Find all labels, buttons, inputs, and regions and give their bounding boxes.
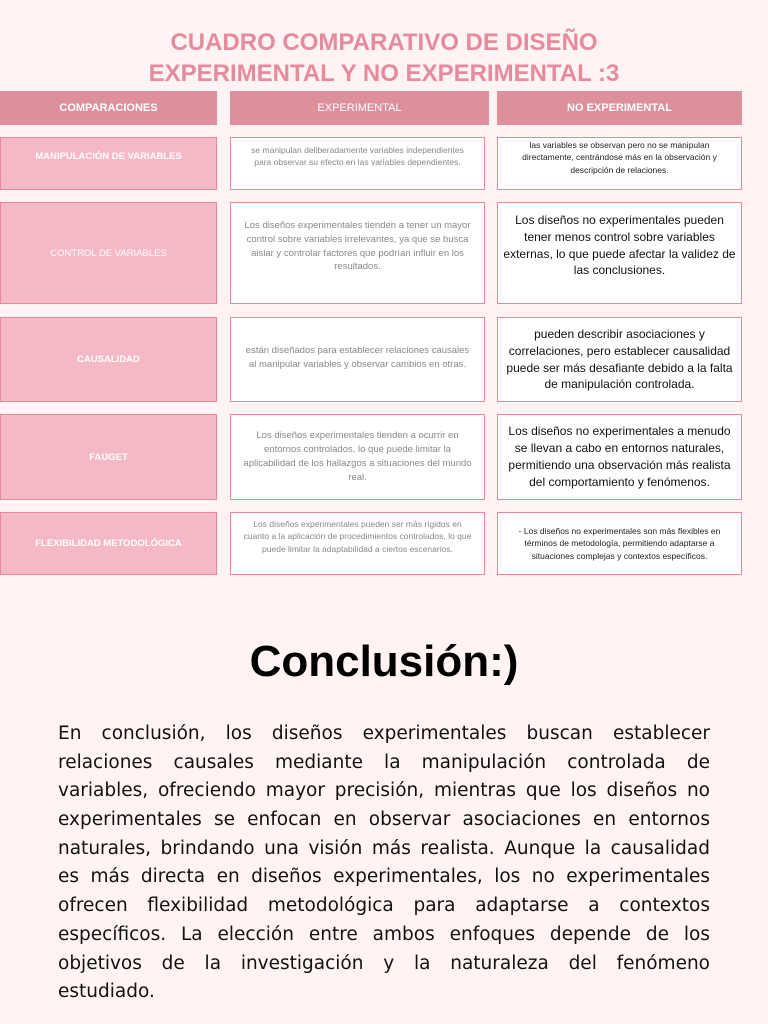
cell: noexp causalidad: puede ser más desafiante debido a la falta	[506, 360, 733, 374]
title	[149, 28, 619, 87]
cell: noexp causalidad: de manipulación controlada.	[544, 377, 695, 391]
conclusion text: es más directa en diseños experimentales, los no experimentales	[58, 866, 710, 887]
cell: noexp causalidad: correlaciones, pero establecer causalidad	[509, 344, 730, 358]
cell: exp causalidad: están diseñados para establecer relaciones causales	[246, 345, 469, 356]
cell: noexp control: las conclusiones.	[574, 263, 665, 277]
cell: exp causalidad: al manipular variables y observar cambios en otras.	[249, 359, 466, 370]
cell: exp fauget: aplicabilidad de los hallazgos a situaciones del mundo	[243, 458, 472, 469]
cell: noexp manipulación	[497, 137, 742, 190]
row label: control	[0, 202, 217, 304]
row label: fauget	[0, 414, 217, 500]
conclusion text	[58, 723, 710, 1002]
cell: noexp flexibilidad: - Los diseños no experimentales son más flexibles en	[519, 526, 720, 536]
title: CUADRO COMPARATIVO DE DISEÑO	[170, 29, 598, 56]
cell: exp manipulación: para observar su efecto en las variables dependientes.	[254, 157, 461, 167]
row label: control: CONTROL DE VARIABLES	[50, 248, 167, 258]
cell: exp fauget	[230, 414, 485, 500]
row label: manipulación: MANIPULACIÓN DE VARIABLES	[35, 151, 182, 162]
cell: noexp control: Los diseños no experimentales pueden	[515, 213, 724, 227]
cell: noexp manipulación: descripción de relaciones.	[570, 165, 669, 175]
row label: manipulación	[0, 137, 217, 190]
cell: noexp flexibilidad: situaciones complejas y contextos específicos.	[532, 551, 707, 561]
cell: noexp manipulación: las variables se observan pero no se manipulan	[529, 140, 710, 150]
header: comparaciones	[0, 91, 217, 125]
conclusion text: ofrecen flexibilidad metodológica para adaptarse a contextos	[58, 895, 710, 916]
header: experimental	[230, 91, 489, 125]
cell: exp control: aislar y controlar factores que podrían influir en los	[251, 248, 464, 259]
row label: causalidad: CAUSALIDAD	[77, 354, 140, 365]
cell: exp control: resultados.	[334, 261, 381, 272]
cell: noexp causalidad	[497, 317, 742, 402]
cell: exp manipulación	[230, 137, 485, 190]
row label: flexibilidad	[0, 512, 217, 575]
conclusion text: variables, ofreciendo mayor precisión, mientras que los diseños no	[58, 780, 710, 801]
conclusion text: estudiado.	[58, 981, 155, 1002]
conclusion text: experimentales se enfocan en observar asociaciones en entornos	[58, 809, 710, 830]
cell: exp fauget: Los diseños experimentales tienden a ocurrir en	[256, 430, 459, 441]
conclusion text: específicos. La elección entre ambos enfoques depende de los	[58, 924, 710, 945]
cell: exp flexibilidad: puede limitar la adaptabilidad a ciertos escenarios.	[262, 544, 453, 554]
cell: noexp manipulación: directamente, centrándose más en la observación y	[522, 152, 717, 162]
conclusion text: naturales, brindando una visión más realista. Aunque la causalidad	[58, 838, 710, 859]
header: no experimental	[497, 91, 742, 125]
title: EXPERIMENTAL Y NO EXPERIMENTAL :3	[149, 60, 619, 87]
cell: exp control	[230, 202, 485, 304]
conclusion heading: Conclusión:)	[250, 637, 518, 686]
cell: exp fauget: entornos controlados, lo que puede limitar la	[264, 444, 451, 455]
conclusion text: objetivos de la investigación y la naturaleza del fenómeno	[58, 952, 710, 974]
cell: noexp flexibilidad: términos de metodología, permitiendo adaptarse a	[525, 538, 714, 548]
cell: exp fauget: real.	[348, 472, 367, 483]
header: comparaciones: COMPARACIONES	[59, 102, 158, 114]
header: no experimental: NO EXPERIMENTAL	[567, 102, 672, 114]
cell: noexp flexibilidad	[497, 512, 742, 575]
cell: exp flexibilidad	[230, 512, 485, 575]
cell: noexp causalidad: pueden describir asociaciones y	[534, 327, 705, 341]
cell: noexp fauget: Los diseños no experimentales a menudo	[508, 424, 731, 438]
cell: exp manipulación: se manipulan deliberadamente variables independientes	[251, 145, 464, 155]
cell: exp flexibilidad: Los diseños experimentales pueden ser más rígidos en	[253, 519, 462, 529]
cell: exp flexibilidad: cuanto a la aplicación de procedimientos controlados, lo que	[244, 531, 471, 541]
cell: noexp fauget	[497, 414, 742, 500]
row label: causalidad	[0, 317, 217, 402]
row label: flexibilidad: FLEXIBILIDAD METODOLÓGICA	[35, 538, 182, 549]
header: experimental: EXPERIMENTAL	[317, 102, 402, 114]
cell: exp control: control sobre variables irrelevantes, ya que se busca	[247, 234, 468, 245]
conclusion text: relaciones causales mediante la manipulación controlada de	[58, 752, 710, 773]
row label: fauget: FAUGET	[89, 452, 128, 462]
cell: exp causalidad	[230, 317, 485, 402]
cell: noexp fauget: permitiendo una observación más realista	[508, 458, 731, 472]
cell: exp control: Los diseños experimentales tienden a tener un mayor	[244, 220, 471, 231]
conclusion text: En conclusión, los diseños experimentales buscan establecer	[58, 723, 710, 744]
cell: noexp control: externas, lo que puede afectar la validez de	[503, 247, 736, 261]
cell: noexp control	[497, 202, 742, 304]
cell: noexp fauget: se llevan a cabo en entornos naturales,	[515, 441, 724, 455]
cell: noexp control: tener menos control sobre variables	[524, 230, 715, 244]
cell: noexp fauget: del comportamiento y fenómenos.	[529, 475, 710, 489]
